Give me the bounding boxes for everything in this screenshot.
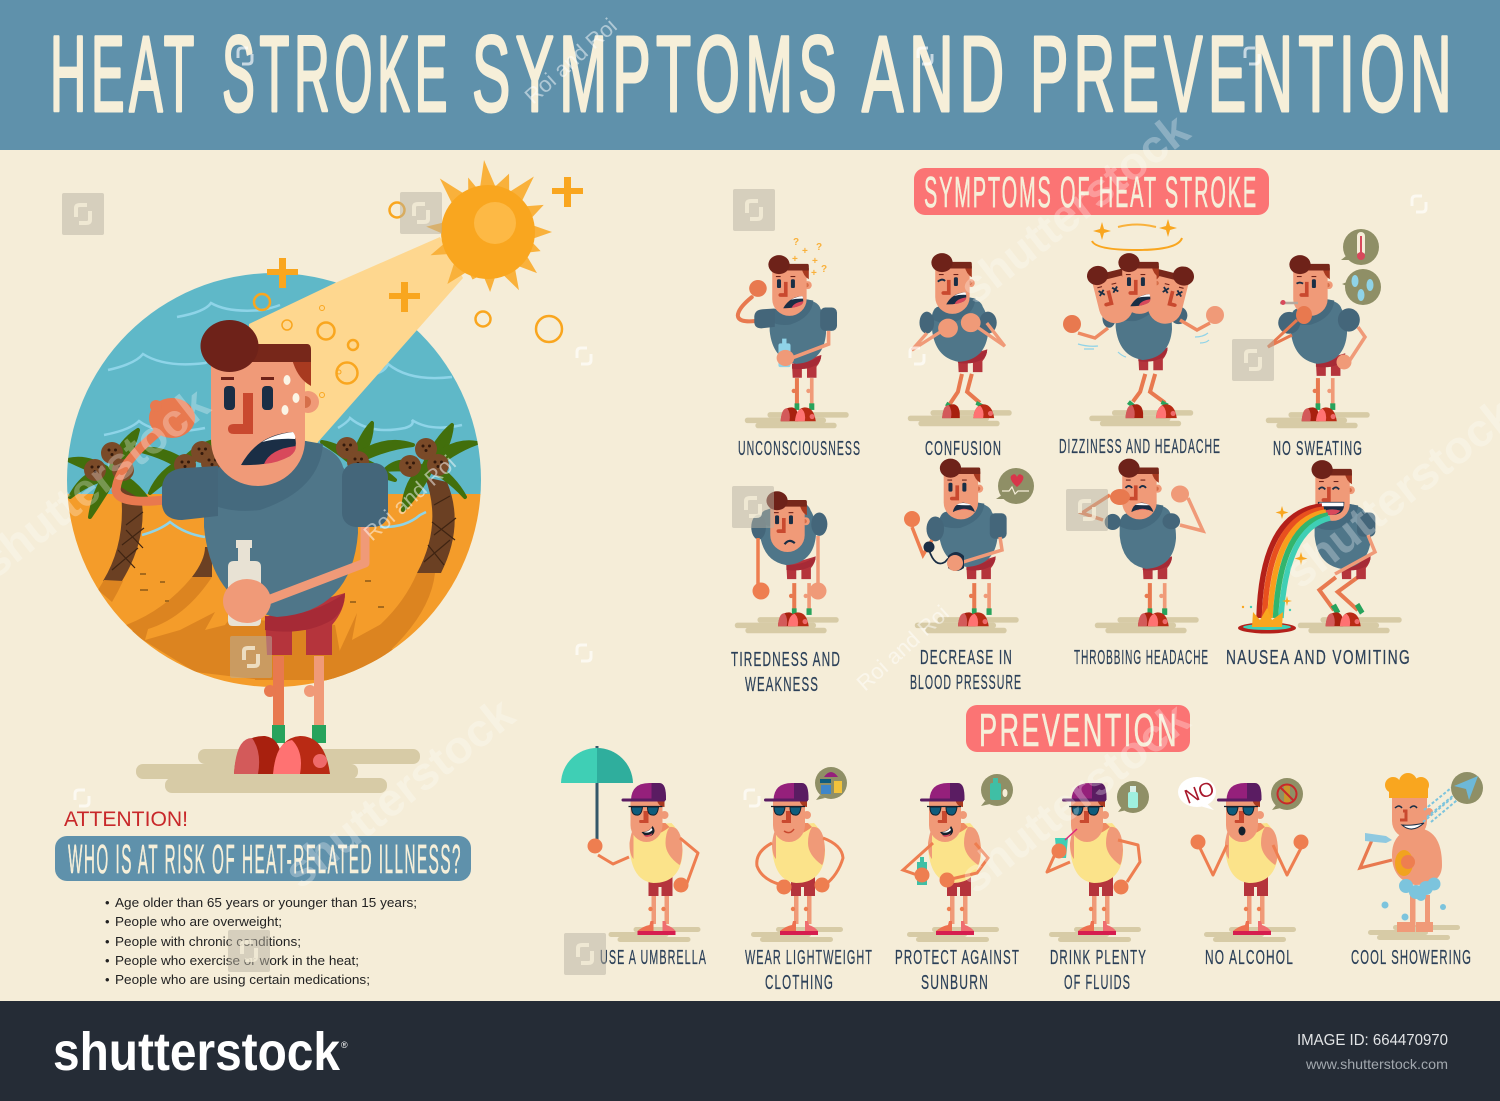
- open mouth: [1318, 502, 1344, 515]
- title: STROKE: [222, 13, 452, 134]
- bubble: clothing: [815, 767, 847, 800]
- footer band: ®: [341, 1040, 348, 1050]
- bent arm: [1335, 535, 1375, 574]
- symptom: unconsciousness: [738, 237, 861, 460]
- symptom: unconsciousness: +: [792, 254, 798, 265]
- symptom: confusion: [908, 253, 1012, 460]
- symptom: unconsciousness: +: [802, 246, 808, 257]
- head: [1392, 795, 1427, 839]
- watermark layer: Roi and Roi: [359, 450, 461, 546]
- vomit puddle and sparkles: [1238, 506, 1308, 634]
- prevention heading: [966, 704, 1190, 756]
- risk list: People with chronic conditions;: [115, 934, 301, 949]
- watermark layer: shutterstock: [949, 692, 1199, 903]
- watermark layer: shutterstock: [274, 687, 524, 898]
- label: [1050, 946, 1147, 994]
- risk list: •: [105, 934, 110, 949]
- risk list: People who are overweight;: [115, 914, 282, 929]
- rainbow vomit: [1259, 506, 1330, 618]
- symptom: nausea and vomiting: [1226, 460, 1411, 669]
- prevention: umbrella: [561, 746, 707, 969]
- label: [910, 646, 1022, 694]
- umbrella: [561, 746, 633, 842]
- label: [731, 648, 841, 696]
- label: NO SWEATING: [1273, 437, 1363, 460]
- label: UNCONSCIOUSNESS: [738, 437, 861, 460]
- bubble: thermometer: [1341, 229, 1379, 265]
- arms and thermometer: [1268, 300, 1365, 370]
- label: OF FLUIDS: [1064, 971, 1131, 994]
- risk list: •: [105, 914, 110, 929]
- symptom: unconsciousness: +: [812, 256, 818, 267]
- watermark layer: shutterstock: [949, 103, 1199, 314]
- heat rings: [254, 202, 562, 398]
- ground shadow: [136, 749, 420, 793]
- symptom: unconsciousness: ?: [793, 237, 799, 248]
- symptom: decrease in blood pressure: [904, 459, 1034, 694]
- symptoms heading: [914, 168, 1269, 217]
- prevention: drink fluids: [1047, 781, 1149, 994]
- watermark layer: Roi and Roi: [520, 13, 622, 109]
- header band with title: [0, 0, 1500, 150]
- image id: IMAGE ID: 664470970: [1297, 1032, 1448, 1049]
- risk list: •: [105, 972, 110, 987]
- label: SUNBURN: [921, 971, 989, 994]
- attention label: ATTENTION!: [64, 808, 188, 831]
- symptom: unconsciousness: ?: [816, 242, 822, 253]
- risk list: People who exercise or work in the heat;: [115, 953, 359, 968]
- main illustration: sun, beach circle, man: [60, 160, 583, 793]
- prevention: lightweight clothing: [745, 767, 873, 994]
- prevention heading: PREVENTION: [979, 704, 1179, 756]
- heat plus signs: [267, 177, 583, 312]
- watermark layer: Roi and Roi: [852, 600, 954, 696]
- arms holding head: [1082, 486, 1203, 531]
- label: CONFUSION: [925, 437, 1002, 460]
- shower spray: [1423, 784, 1462, 822]
- prevention: sunburn: [895, 774, 1020, 994]
- symptom: unconsciousness: ?: [821, 264, 827, 275]
- risk list: People who are using certain medications;: [115, 972, 370, 987]
- beach circle: [60, 270, 490, 694]
- footer band: [0, 1001, 1500, 1101]
- label: [745, 946, 873, 994]
- risk list: [105, 895, 417, 987]
- bubble: sweat drops: [1342, 269, 1381, 305]
- sand shadows: [98, 573, 435, 686]
- title: HEAT: [50, 13, 199, 134]
- risk badge: [55, 836, 471, 882]
- title: [50, 13, 1457, 134]
- infographic canvas: WHO IS AT RISK OF HEAT-RELATED ILLNESS?: [68, 836, 462, 882]
- sun: [426, 160, 552, 294]
- hanging arms: [752, 536, 826, 600]
- man legs and shoes: [234, 656, 330, 774]
- foam: [1382, 878, 1446, 920]
- bubble: water bottle: [1117, 781, 1149, 813]
- sunscreen bottle: [917, 857, 927, 885]
- sun beam: [249, 237, 463, 470]
- bubble: NO: NO: [1182, 778, 1217, 809]
- symptom: tiredness and weakness: [731, 491, 841, 696]
- label: [895, 946, 1020, 994]
- label: DIZZINESS AND HEADACHE: [1059, 435, 1221, 458]
- infographic canvas: THROBBING HEADACHE: [1074, 646, 1209, 669]
- label: NO ALCOHOL: [1205, 946, 1294, 969]
- man raised arm: [116, 398, 195, 501]
- sweat drops: [282, 375, 300, 415]
- halo: [1092, 219, 1182, 250]
- symptom: no sweating: [1266, 229, 1381, 460]
- label: DECREASE IN: [920, 646, 1013, 669]
- man head: [200, 320, 319, 486]
- drink glass: [1055, 829, 1077, 858]
- website: www.shutterstock.com: [1305, 1056, 1448, 1072]
- bubble: heart rate: [996, 468, 1034, 504]
- risk list: •: [105, 953, 110, 968]
- label: WEAKNESS: [745, 673, 819, 696]
- label: DRINK PLENTY: [1050, 946, 1147, 969]
- label: TIREDNESS AND: [731, 648, 841, 671]
- label: USE A UMBRELLA: [600, 946, 707, 969]
- prevention: cool showering: [1351, 772, 1483, 969]
- arm with bottle and sponge: [1360, 833, 1415, 876]
- label: NAUSEA AND VOMITING: [1226, 646, 1411, 669]
- label: WEAR LIGHTWEIGHT: [745, 946, 873, 969]
- bubble: shower: [1451, 772, 1483, 804]
- arms and motion lines: [1063, 306, 1224, 357]
- symptom: dizziness and headache: [1059, 219, 1224, 458]
- label: BLOOD PRESSURE: [910, 671, 1022, 694]
- title: SYMPTOMS: [472, 13, 842, 134]
- palm trees: [68, 423, 477, 581]
- risk list: •: [105, 895, 110, 910]
- shutterstock logo: shutterstock: [53, 1022, 341, 1082]
- bottle and holding arm: [223, 527, 365, 626]
- bubble: sunscreen: [981, 774, 1013, 806]
- symptom: unconsciousness: +: [811, 268, 817, 279]
- man shorts and shirt: [162, 440, 388, 655]
- orange hair: [1385, 773, 1429, 798]
- label: CLOTHING: [765, 971, 834, 994]
- bubble: no alcohol sign: [1271, 778, 1303, 810]
- risk list: Age older than 65 years or younger than 15 years;: [115, 895, 417, 910]
- arms and monitor: [904, 511, 1002, 571]
- title: AND: [862, 13, 1010, 134]
- symptom: throbbing headache: [1074, 459, 1209, 669]
- label: PROTECT AGAINST: [895, 946, 1020, 969]
- prevention: no alcohol: [1178, 777, 1308, 969]
